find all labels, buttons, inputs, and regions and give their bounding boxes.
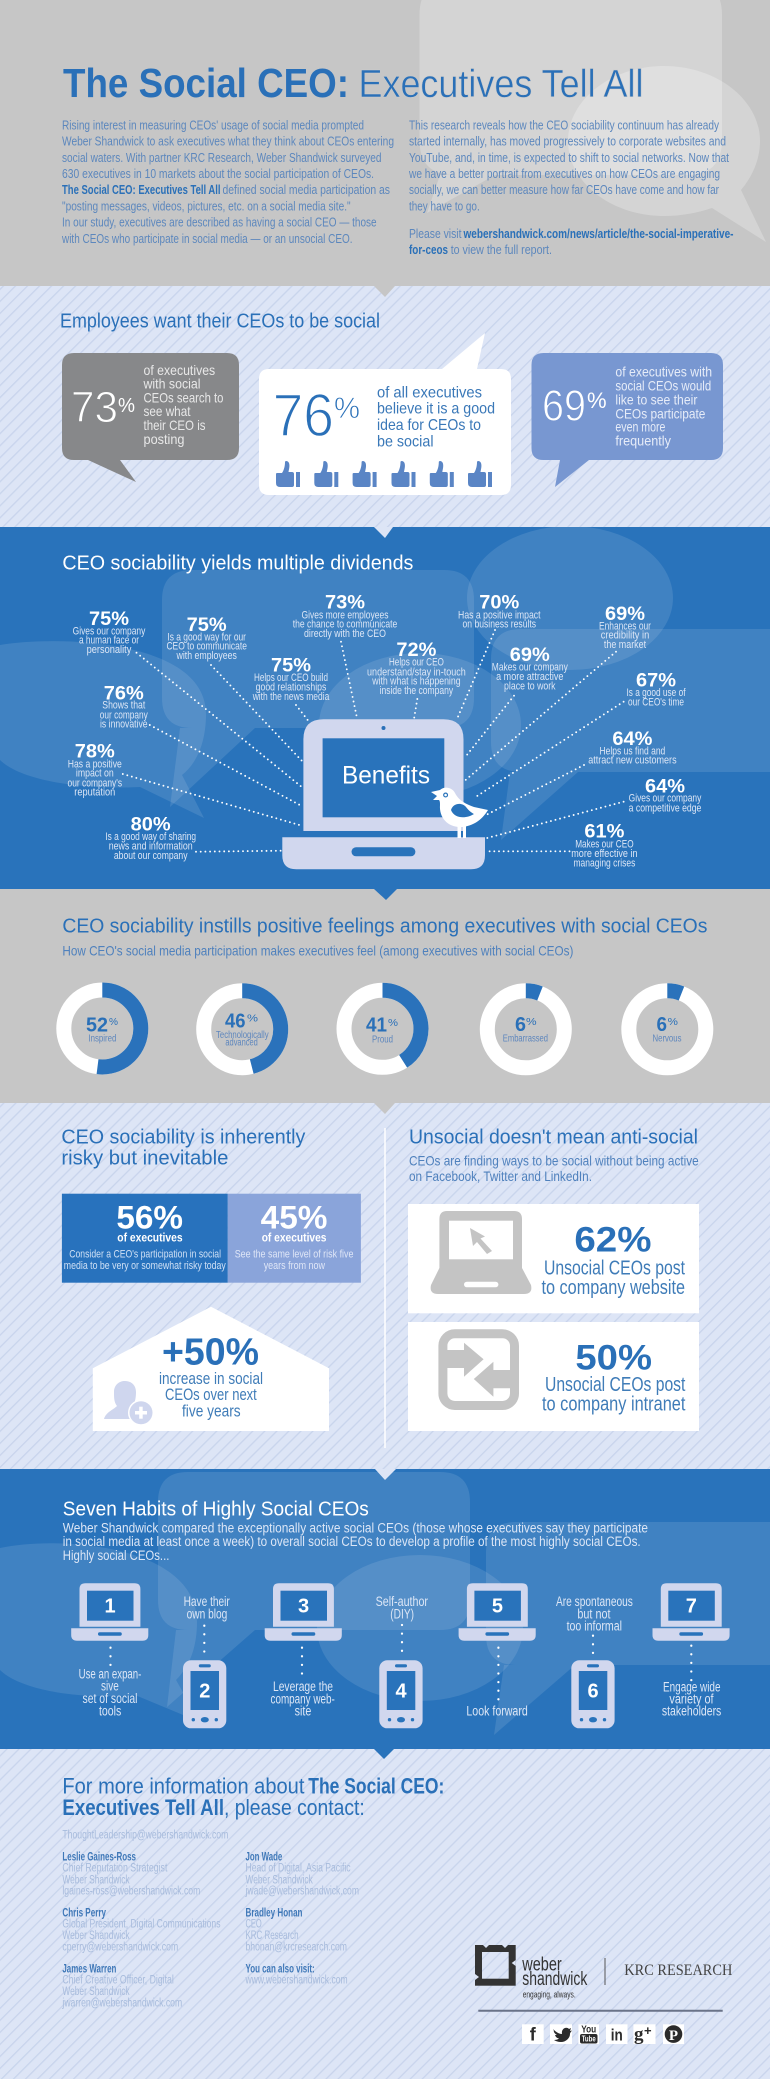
- donut chart: nervous 6 percent: [629, 991, 706, 1068]
- donut chart: inspired 52 percent: Inspired: [88, 1034, 116, 1045]
- panel: risky but inevitable: [61, 1126, 361, 1431]
- donut chart: embarrassed 6 percent: 6: [515, 1014, 526, 1036]
- stat: 76 percent innovative: our company: [100, 709, 148, 721]
- stat: 61 percent managing crises: [571, 822, 638, 870]
- stat: 73 percent chance to communicate: directly with the CEO: [304, 628, 386, 640]
- stat: 70 percent business results: Has a positive impact: [458, 609, 541, 621]
- stat: 80 percent sharing news: [105, 815, 196, 862]
- panel: positive feelings: [0, 889, 770, 1103]
- stat: 72 percent stay in touch: with what is happening: [371, 676, 461, 688]
- icon: intranet arrows: [438, 1334, 519, 1406]
- icon: google plus: g: [634, 2024, 644, 2045]
- icon: benefits laptop: Benefits: [342, 761, 430, 789]
- logo: Weber Shandwick: shandwick: [522, 1969, 588, 1990]
- callout: 73 percent: CEOs search to: [144, 389, 224, 405]
- callout: 73 percent: [62, 353, 239, 482]
- habit 5: laptop: 5: [492, 1596, 503, 1618]
- callout: 76 percent: [259, 333, 511, 495]
- stat: 78 percent reputation: our company's: [68, 777, 122, 789]
- contact: James Warren: Weber Shandwick: [62, 1986, 130, 1998]
- logo: KRC Research: KRC RESEARCH: [624, 1962, 733, 1979]
- intro text: left column: Weber Shandwick to ask executives what they think about CEOs entering: [62, 134, 394, 148]
- icon: bird: [431, 788, 488, 838]
- stat: 75 percent news media: 75%: [271, 656, 311, 677]
- icon: youtube: Tube: [582, 2034, 596, 2044]
- callout: 69 percent: %: [587, 388, 607, 413]
- stat: 69 percent credibility: the market: [604, 639, 646, 651]
- habit 6: phone: Are spontaneous: [556, 1594, 633, 1609]
- stat: 78 percent reputation: 78%: [75, 742, 115, 763]
- contact: Leslie Gaines-Ross: Chief Reputation Strategist: [62, 1863, 168, 1875]
- contact: James Warren: Chief Creative Officer, Digital: [62, 1975, 174, 1987]
- heading: , please contact:: [224, 1795, 365, 1820]
- stat: 61 percent managing crises: 61%: [584, 822, 625, 843]
- stat: 61 percent managing crises: managing crises: [573, 858, 636, 870]
- intro text: left column: defined social media participation as: [222, 183, 390, 197]
- panel: introduction: [0, 0, 770, 286]
- arrow: section connector: [375, 1469, 396, 1480]
- logo: Weber Shandwick: [475, 1945, 588, 1999]
- donut chart: technologically advanced 46 percent: 46: [225, 1011, 246, 1033]
- stat: 67 percent good use of time: [626, 671, 686, 708]
- stat: 72 percent stay in touch: Helps our CEO: [389, 657, 444, 669]
- habit 2: phone: Have their: [184, 1594, 230, 1609]
- icon: linkedin: [606, 2024, 628, 2044]
- habit 3: laptop: Leverage the: [273, 1679, 333, 1694]
- card: 62 percent website: [408, 1204, 699, 1313]
- intro text: left column: with CEOs who participate in social media — or an unsocial CEO.: [61, 232, 352, 246]
- contact: Leslie Gaines-Ross: lgaines-ross@webershandwick.com: [62, 1885, 200, 1897]
- stat: 75 percent communicate with employees: CEO to communicate: [166, 641, 247, 653]
- heading: Unsocial doesn't mean anti-social: [409, 1126, 698, 1148]
- description: [63, 1520, 648, 1563]
- contact: Jon Wade: jwade@webershandwick.com: [245, 1885, 359, 1897]
- callout: 69 percent: frequently: [615, 433, 671, 449]
- stat: 64 percent competitive edge: a competitive edge: [629, 803, 701, 815]
- card: 62 percent website: to company website: [542, 1277, 685, 1299]
- stat: 61 percent managing crises: more effective in: [571, 848, 638, 860]
- stat: 75 percent communicate with employees: [166, 615, 247, 662]
- donut chart: technologically advanced 46 percent: Technologically: [216, 1030, 269, 1041]
- intro text: right column: they have to go.: [409, 200, 480, 214]
- stat: 69 percent attractive place to work: [492, 645, 568, 692]
- contact: Chris Perry: cperry@webershandwick.com: [62, 1941, 178, 1953]
- stat: 67 percent good use of time: 67%: [636, 671, 676, 692]
- stat: 73 percent chance to communicate: Gives more employees: [302, 609, 389, 621]
- contact: Jon Wade: Jon Wade: [246, 1852, 282, 1864]
- stat: 72 percent stay in touch: understand/stay in-touch: [367, 666, 466, 678]
- icon: laptop with cursor: [431, 1211, 531, 1294]
- habit 7: laptop: 7: [686, 1596, 697, 1618]
- stat: 72 percent stay in touch: 72%: [396, 640, 437, 661]
- subheading: How CEO's social media participation makes executives feel (among executives with social CEOs): [62, 942, 573, 958]
- donut chart: proud 41 percent: 41: [366, 1015, 387, 1037]
- contact: Jon Wade: Weber Shandwick: [246, 1874, 313, 1886]
- icon: youtube: You: [581, 2024, 596, 2036]
- icon: pinterest: [663, 2024, 684, 2044]
- stat: 76 percent innovative: [100, 683, 148, 730]
- stat: 64 percent new customers: 64%: [612, 729, 653, 750]
- intro text: left column: "posting messages, videos, pictures, etc. on a social media site.": [62, 200, 351, 214]
- stat: 69 percent credibility: [599, 604, 651, 651]
- stat: 75 percent human face: personality: [87, 644, 132, 656]
- habit 1: laptop: Use an expan-: [79, 1666, 141, 1681]
- habit 3: laptop: site: [295, 1703, 311, 1718]
- callout: 73 percent: their CEO is: [144, 417, 206, 433]
- heading: CEO sociability instills positive feelings among executives with social CEOs: [62, 915, 707, 937]
- habit 2: phone: own blog: [187, 1606, 227, 1621]
- contact: Bradley Honan: Bradley Honan: [246, 1908, 302, 1920]
- stat: 72 percent stay in touch: inside the company: [380, 685, 454, 697]
- donut chart: technologically advanced 46 percent: advanced: [225, 1038, 258, 1049]
- callout: 76 percent: 76: [273, 382, 334, 449]
- donut chart: proud 41 percent: [344, 990, 421, 1067]
- donut chart: technologically advanced 46 percent: %: [247, 1014, 258, 1025]
- intro text: right column: Please visit: [409, 227, 462, 241]
- callout: 69 percent: social CEOs would: [615, 378, 711, 394]
- callout: 69 percent: [532, 353, 723, 487]
- stat box: 56 percent: Consider a CEO's participation in social: [69, 1249, 221, 1261]
- stat box: 56 percent: 56%: [116, 1199, 183, 1235]
- stat: 64 percent competitive edge: Gives our company: [629, 793, 702, 805]
- stat: 70 percent business results: [458, 593, 541, 631]
- callout: 73 percent: of executives: [144, 362, 215, 378]
- habit 7: laptop: [652, 1583, 730, 1719]
- logo: Weber Shandwick: weber: [522, 1955, 562, 1976]
- icon: benefits laptop: [282, 719, 485, 869]
- icon: youtube: [578, 2024, 599, 2044]
- stat box: 45 percent: 45%: [261, 1199, 328, 1235]
- arrow: section connector: [374, 1103, 395, 1114]
- stat: 75 percent human face: 75%: [89, 609, 129, 630]
- donut chart: nervous 6 percent: %: [668, 1017, 678, 1028]
- donut chart: nervous 6 percent: Nervous: [652, 1034, 682, 1045]
- habit 2: phone: 2: [199, 1681, 210, 1703]
- description: Highly social CEOs...: [63, 1548, 169, 1563]
- stat: 78 percent reputation: impact on: [76, 768, 114, 780]
- icon: linkedin: in: [611, 2026, 623, 2044]
- subheading: CEOs are finding ways to be social without being active: [409, 1153, 699, 1169]
- stat: 73 percent chance to communicate: the chance to communicate: [293, 619, 397, 631]
- callout: 73 percent: with social: [143, 375, 200, 391]
- stat box: 56 percent: of executives: [117, 1231, 183, 1245]
- stat: 75 percent communicate with employees: with employees: [176, 650, 237, 662]
- stat box: 45 percent: of executives: [262, 1231, 327, 1245]
- habit 7: laptop: stakeholders: [662, 1704, 721, 1719]
- callout: 76 percent: idea for CEOs to: [377, 417, 481, 434]
- stat: 76 percent innovative: 76%: [104, 683, 144, 704]
- stat: 75 percent news media: Helps our CEO build: [254, 672, 328, 684]
- description: Weber Shandwick compared the exceptionally active social CEOs (those whose executives say they participate: [63, 1520, 648, 1535]
- logo: Weber Shandwick: engaging, always.: [523, 1989, 576, 1999]
- habit 1: laptop: [71, 1583, 148, 1718]
- donut chart: inspired 52 percent: [64, 990, 141, 1067]
- donut chart: inspired 52 percent: 52: [86, 1015, 108, 1037]
- contact: Leslie Gaines-Ross: [62, 1852, 200, 1897]
- callout: plus 50 percent house: five years: [182, 1402, 241, 1421]
- stat: 76 percent innovative: is innovative: [100, 718, 148, 730]
- contact: Bradley Honan: bhonan@krcresearch.com: [246, 1941, 347, 1953]
- callout: 73 percent: %: [118, 395, 135, 417]
- stat: 75 percent communicate with employees: 75%: [187, 615, 227, 636]
- stat: 73 percent chance to communicate: 73%: [325, 593, 365, 614]
- intro text: left column: social waters. With partner KRC Research, Weber Shandwick surveyed: [62, 151, 382, 165]
- habit 1: laptop: tools: [99, 1703, 121, 1718]
- callout: 73 percent: posting: [144, 431, 184, 447]
- callout: 69 percent: like to see their: [615, 391, 698, 407]
- callout: plus 50 percent house: CEOs over next: [165, 1385, 257, 1404]
- social media icons: [522, 2023, 684, 2045]
- stat: 67 percent good use of time: our CEO's time: [628, 696, 684, 708]
- stat: 75 percent news media: with the news media: [252, 691, 330, 703]
- contact: Jon Wade: Head of Digital, Asia Pacific: [246, 1863, 351, 1875]
- stat: 64 percent competitive edge: 64%: [645, 777, 685, 798]
- subheading: [409, 1153, 699, 1184]
- heading: [62, 1773, 444, 1820]
- stat: 67 percent good use of time: Is a good use of: [626, 687, 686, 699]
- callout: 73 percent: 73: [71, 383, 118, 432]
- icon: pinterest: P: [669, 2028, 678, 2044]
- habit 6: phone: too informal: [567, 1619, 622, 1634]
- contact email: ThoughtLeadership@webershandwick.com: [62, 1829, 228, 1841]
- arrow: section connector: [374, 527, 393, 538]
- habit 3: laptop: 3: [298, 1596, 309, 1618]
- title: The Social CEO:: [63, 60, 349, 106]
- stat: 69 percent credibility: 69%: [605, 604, 645, 625]
- donut chart: embarrassed 6 percent: %: [526, 1017, 537, 1028]
- heading: For more information about: [62, 1773, 304, 1798]
- contact: James Warren: [62, 1964, 182, 2009]
- habit 4: phone: 4: [395, 1681, 407, 1703]
- stat: 69 percent attractive place to work: place to work: [504, 680, 556, 692]
- intro text: right column: to view the full report.: [451, 243, 552, 257]
- stat box: 56 percent: media to be very or somewhat risky today: [64, 1260, 226, 1272]
- contact: Chris Perry: Chris Perry: [62, 1908, 106, 1920]
- stat: 61 percent managing crises: Makes our CEO: [575, 838, 634, 850]
- arrow: section connector: [374, 889, 397, 900]
- icon: add person: [104, 1381, 154, 1426]
- arrow: section connector: [374, 1749, 394, 1759]
- heading: Seven Habits of Highly Social CEOs: [63, 1499, 369, 1521]
- habit 6: phone: [556, 1594, 633, 1728]
- card: 50 percent intranet: to company intranet: [542, 1394, 686, 1416]
- callout: 76 percent: %: [334, 392, 360, 425]
- callout: 69 percent: of executives with: [615, 364, 712, 380]
- stat: 75 percent human face: Gives our company: [73, 625, 146, 637]
- stat: 75 percent human face: [73, 609, 146, 656]
- panel: employees want their CEOs to be social: [0, 286, 770, 528]
- panel: CEO sociability yields multiple dividends: [0, 526, 770, 889]
- icon: facebook: f: [530, 2024, 537, 2044]
- heading: CEO sociability yields multiple dividends: [62, 552, 413, 574]
- stat: 78 percent reputation: Has a positive: [68, 758, 122, 770]
- panel: risk and unsocial CEOs: [0, 1103, 770, 1469]
- callout: 76 percent: be social: [377, 434, 434, 451]
- donut chart: embarrassed 6 percent: Embarrassed: [503, 1034, 548, 1045]
- contact: Chris Perry: Global President, Digital Communications: [62, 1919, 221, 1931]
- habit 7: laptop: variety of: [669, 1692, 714, 1707]
- callout: plus 50 percent house: +50%: [162, 1331, 259, 1373]
- stat: 69 percent attractive place to work: 69%: [510, 645, 550, 666]
- card: 62 percent website: Unsocial CEOs post: [544, 1257, 685, 1279]
- description: in social media at least once a week) to overall social CEOs to develop a profile of the most highly social CEOs.: [63, 1534, 641, 1549]
- habit 1: laptop: 1: [104, 1596, 116, 1618]
- contact: James Warren: James Warren: [62, 1964, 116, 1976]
- heading: The Social CEO:: [308, 1773, 444, 1798]
- intro text: left column: In our study, executives are described as having a social CEO — those: [62, 216, 377, 230]
- panel: contact information: [0, 1749, 770, 2079]
- card: 50 percent intranet: [408, 1322, 699, 1431]
- callout: plus 50 percent house: increase in social: [159, 1369, 263, 1388]
- subheading: on Facebook, Twitter and LinkedIn.: [409, 1168, 592, 1184]
- contact: website: You can also visit:: [246, 1964, 315, 1976]
- stat box: 56 percent: [62, 1194, 228, 1283]
- habit 4: phone: [376, 1594, 428, 1728]
- icon: google plus: +: [644, 2023, 652, 2038]
- stat: 64 percent new customers: attract new customers: [588, 755, 677, 767]
- stat: 75 percent news media: good relationships: [256, 681, 327, 693]
- habit 3: laptop: company web-: [270, 1692, 335, 1707]
- icon: twitter: [550, 2024, 572, 2044]
- intro text: left column: [61, 118, 394, 246]
- heading: Executives Tell All: [62, 1795, 224, 1820]
- stat: 72 percent stay in touch: [367, 640, 466, 697]
- contact: James Warren: jwarren@webershandwick.com: [62, 1997, 182, 2009]
- habit 1: laptop: set of social: [82, 1691, 138, 1706]
- contact: Chris Perry: Weber Shandwick: [62, 1930, 130, 1942]
- icon: thumbs up row: [276, 461, 492, 487]
- stat: 64 percent new customers: Helps us find and: [600, 745, 665, 757]
- title: [63, 60, 644, 106]
- callout: plus 50 percent house: [93, 1307, 329, 1431]
- stat: 69 percent attractive place to work: Makes our company: [492, 662, 568, 674]
- contact: Bradley Honan: KRC Research: [246, 1930, 298, 1942]
- stat: 70 percent business results: on business results: [462, 619, 536, 631]
- donut chart: proud 41 percent: Proud: [372, 1034, 393, 1045]
- habit 2: phone: [183, 1594, 230, 1728]
- contact: Jon Wade: [245, 1852, 359, 1897]
- stat: 75 percent communicate with employees: Is a good way for our: [167, 631, 246, 643]
- contact: Leslie Gaines-Ross: Weber Shandwick: [62, 1874, 130, 1886]
- callout: 76 percent: of all executives: [377, 384, 482, 401]
- stat box: 45 percent: See the same level of risk five: [235, 1249, 354, 1261]
- stat: 70 percent business results: 70%: [479, 593, 519, 614]
- stat: 69 percent attractive place to work: a more attractive: [496, 671, 563, 683]
- stat: 69 percent credibility: Enhances our: [599, 620, 651, 632]
- habit 1: laptop: sive: [101, 1679, 119, 1694]
- habit 7: laptop: Engage wide: [663, 1679, 720, 1694]
- habit 3: laptop: [265, 1583, 342, 1718]
- habit 4: phone: (DIY): [390, 1606, 414, 1621]
- heading: Employees want their CEOs to be social: [60, 311, 380, 333]
- arrow: section connector: [374, 286, 395, 297]
- panel: seven habits of highly social CEOs: [0, 1469, 770, 1749]
- panel: unsocial does not mean anti-social: [408, 1126, 699, 1431]
- stat: 78 percent reputation: reputation: [74, 787, 115, 799]
- contact: website: [245, 1964, 348, 1987]
- donut chart: nervous 6 percent: 6: [656, 1014, 667, 1036]
- dotted connector lines: [123, 630, 624, 852]
- card: 50 percent intranet: Unsocial CEOs post: [545, 1374, 686, 1396]
- stat: 69 percent credibility: credibility in: [601, 630, 649, 642]
- heading: CEO sociability is inherently: [61, 1126, 305, 1148]
- contact: Bradley Honan: CEO: [246, 1919, 262, 1931]
- intro text: left column: Rising interest in measuring CEOs' usage of social media prompted: [62, 118, 364, 132]
- habit 5: laptop: Look forward: [466, 1704, 528, 1719]
- habit 6: phone: 6: [587, 1681, 599, 1703]
- stat: 76 percent innovative: Shows that: [102, 700, 145, 712]
- donut chart: embarrassed 6 percent: [487, 991, 564, 1068]
- callout: 69 percent: 69: [542, 382, 586, 431]
- callout: 69 percent: even more: [615, 419, 666, 435]
- heading: [61, 1126, 305, 1169]
- stat: 64 percent competitive edge: [629, 777, 702, 815]
- stat: 78 percent reputation: [68, 742, 122, 799]
- stat box: 45 percent: [228, 1194, 361, 1283]
- intro text: right column: for-ceos: [409, 243, 448, 257]
- contact: Chris Perry: [62, 1908, 221, 1953]
- donut chart: inspired 52 percent: %: [109, 1017, 118, 1028]
- intro text: left column: The Social CEO: Executives Tell All: [62, 183, 220, 197]
- callout: 76 percent: believe it is a good: [377, 400, 495, 417]
- stat: 75 percent news media: [252, 656, 330, 703]
- intro text: left column: 630 executives in 10 markets about the social participation of CEOs.: [62, 167, 374, 181]
- callout: 73 percent: see what: [144, 403, 191, 419]
- stat: 64 percent new customers: [588, 729, 677, 767]
- title: Executives Tell All: [358, 63, 644, 106]
- stat: 75 percent human face: a human face or: [79, 635, 139, 647]
- habit 4: phone: Self-author: [376, 1594, 428, 1609]
- heading: risky but inevitable: [61, 1147, 228, 1169]
- donut chart: technologically advanced 46 percent: [204, 991, 281, 1068]
- contact: website: www.webershandwick.com: [245, 1975, 348, 1987]
- card: 50 percent intranet: 50%: [575, 1338, 652, 1377]
- stat: 80 percent sharing news: news and information: [109, 840, 193, 852]
- habit 6: phone: but not: [577, 1606, 611, 1621]
- callout: 69 percent: CEOs participate: [615, 405, 706, 421]
- habit 5: laptop: [459, 1583, 536, 1719]
- contact: Bradley Honan: [246, 1908, 347, 1953]
- stat: 80 percent sharing news: about our company: [114, 850, 188, 862]
- contact: Leslie Gaines-Ross: Leslie Gaines-Ross: [62, 1852, 136, 1864]
- card: 62 percent website: 62%: [574, 1221, 652, 1260]
- stat: 80 percent sharing news: 80%: [131, 815, 171, 836]
- icon: facebook: [522, 2024, 544, 2044]
- donut chart: proud 41 percent: %: [388, 1018, 398, 1029]
- intro text: right column: [408, 118, 734, 257]
- stat: 73 percent chance to communicate: [293, 593, 397, 640]
- stat: 80 percent sharing news: Is a good way of sharing: [105, 831, 196, 843]
- icon: google plus: [633, 2023, 656, 2045]
- stat box: 45 percent: years from now: [264, 1260, 325, 1272]
